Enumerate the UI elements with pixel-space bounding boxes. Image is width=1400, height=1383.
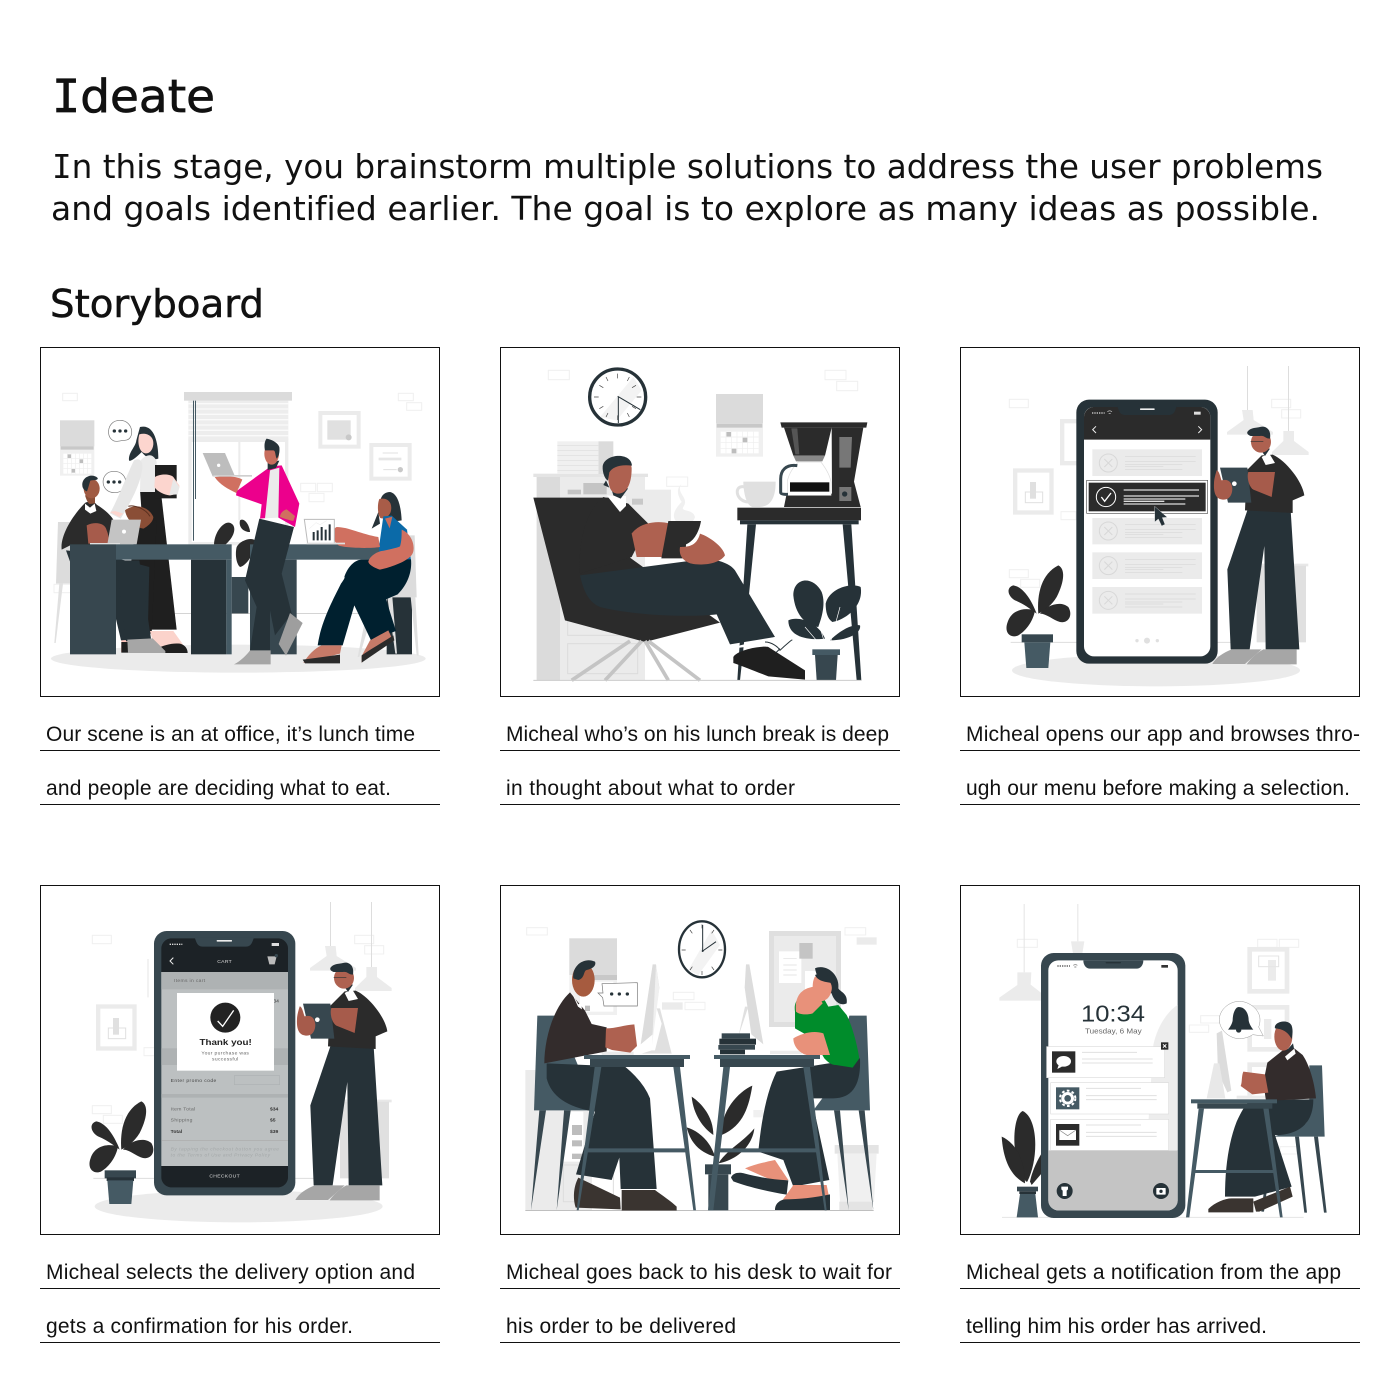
- wall frames: [318, 411, 412, 481]
- thank you card: successful: [212, 1057, 239, 1063]
- caption: Micheal goes back to his desk to wait for: [506, 1261, 892, 1284]
- plant: [1006, 565, 1070, 668]
- lock screen time: 10:34: [1081, 1000, 1145, 1026]
- selected row: [1087, 480, 1208, 513]
- phone text: CHECKOUT: [209, 1174, 240, 1180]
- phone: [1041, 953, 1185, 1218]
- plant: [687, 1086, 754, 1210]
- menu rows: [1092, 449, 1202, 614]
- phone: [154, 931, 295, 1195]
- front table: [70, 544, 232, 654]
- calendar: [716, 394, 763, 457]
- thank you card: Your purchase was: [201, 1050, 249, 1056]
- panel: back at desk: [500, 886, 900, 1342]
- man seated: [580, 456, 805, 680]
- bell bubble: [1219, 1001, 1263, 1039]
- wall frames: [1013, 419, 1080, 515]
- caption: telling him his order has arrived.: [966, 1315, 1267, 1338]
- window with blinds: [184, 392, 292, 544]
- phone text: $34: [270, 1106, 279, 1112]
- caption: and people are deciding what to eat.: [46, 777, 391, 800]
- lock screen time: [1081, 1000, 1145, 1035]
- woman standing: [110, 427, 188, 653]
- intro paragraph: and goals identified earlier. The goal is to explore as many ideas as possible.: [51, 189, 1320, 228]
- caption: [960, 723, 1360, 804]
- phone text: [161, 954, 288, 1180]
- illustration: phone notifications and man at desk: [999, 904, 1327, 1218]
- illustration: two people at desks: [525, 921, 879, 1211]
- lock screen time: Tuesday, 6 May: [1085, 1026, 1142, 1035]
- caption: [960, 1261, 1360, 1342]
- title: Ideate: [52, 70, 215, 123]
- man seated: [1208, 1022, 1316, 1212]
- caption: gets a confirmation for his order.: [46, 1315, 353, 1338]
- chair: [1261, 1065, 1327, 1213]
- caption: [500, 1261, 900, 1342]
- caption: [40, 1261, 440, 1342]
- wall frames: [96, 959, 149, 1051]
- panel: browsing the app: [960, 348, 1360, 804]
- illustration: man with coffee in armchair: [533, 369, 867, 680]
- caption: Micheal gets a notification from the app: [966, 1261, 1341, 1284]
- panel: notification: [960, 886, 1360, 1342]
- phone text: CART: [217, 959, 232, 965]
- side table: [737, 508, 861, 680]
- phone text: $39: [270, 1129, 279, 1135]
- speech bubbles: [103, 420, 132, 493]
- section heading: storyboard: Storyboard: [50, 282, 264, 326]
- book stack: [718, 1033, 756, 1054]
- phone: [1076, 400, 1218, 664]
- illustration: phone with thank you message: [89, 902, 392, 1222]
- cabinet and floor line: [1011, 564, 1308, 642]
- armchair: [533, 498, 720, 680]
- wall frames: [1247, 947, 1289, 1097]
- background cabinet and calendar: [525, 938, 617, 1210]
- calendar: [60, 420, 94, 476]
- cabinet and floor line: [93, 1100, 392, 1178]
- man with tablet: [1212, 427, 1304, 664]
- clock: [679, 921, 725, 977]
- phone text: By tapping the checkout button you agree: [171, 1146, 279, 1152]
- phone text: Total: [171, 1129, 183, 1135]
- monitor and keyboard: [1207, 1031, 1277, 1099]
- man with tablet: [295, 963, 387, 1200]
- caption: Micheal selects the delivery option and: [46, 1261, 415, 1284]
- desks: [577, 1055, 827, 1210]
- table rear: [250, 544, 412, 654]
- caption: Our scene is an at office, it’s lunch time: [46, 723, 415, 746]
- panel: lunch break: [500, 348, 900, 804]
- notice board: [769, 931, 841, 1027]
- pendant lamps: [1227, 366, 1309, 455]
- woman right: [303, 492, 419, 663]
- cup and steam: [674, 482, 776, 522]
- panel: office scene: [40, 348, 440, 804]
- monitors: [602, 964, 802, 1055]
- caption: Micheal opens our app and browses thro-: [966, 723, 1360, 746]
- caption: Micheal who’s on his lunch break is deep: [506, 723, 889, 746]
- phone text: $5: [270, 1118, 276, 1124]
- plant: [89, 1101, 153, 1204]
- pendant lamps: [310, 902, 392, 991]
- thank you card: [177, 993, 274, 1071]
- panel: order confirmation: [40, 886, 440, 1342]
- floor line: [1002, 1216, 1304, 1219]
- clock: [590, 369, 646, 425]
- chair left: [54, 522, 71, 643]
- caption: ugh our menu before making a selection.: [966, 777, 1350, 800]
- phone text: Items in cart: [174, 978, 206, 984]
- floor line: [525, 1209, 874, 1211]
- desk: [1186, 1099, 1283, 1217]
- intro paragraph: [51, 147, 1323, 228]
- chairs: [531, 1016, 873, 1210]
- woman at desk: [731, 967, 860, 1210]
- intro paragraph: In this stage, you brainstorm multiple solutions to address the user problems: [52, 147, 1323, 186]
- filing cabinet: [533, 441, 671, 680]
- caption: [40, 723, 440, 804]
- plant: [1002, 1111, 1042, 1217]
- small laptop chart: [304, 519, 345, 544]
- man at desk: [544, 960, 677, 1211]
- illustration: man beside phone with menu: [1006, 366, 1309, 686]
- cursor: [1155, 506, 1167, 526]
- man standing pink jacket: [203, 439, 303, 664]
- caption: in thought about what to order: [506, 777, 795, 800]
- phone text: Shipping: [171, 1118, 193, 1124]
- pendant lamps: [999, 904, 1084, 1001]
- illustration: people at office table: [51, 392, 426, 673]
- seated man left: [62, 476, 165, 653]
- coffee maker: [780, 422, 867, 507]
- plant behind: [214, 520, 255, 567]
- notification cards: [1047, 1042, 1169, 1150]
- laptop: [90, 520, 141, 545]
- phone text: Item Total: [171, 1106, 196, 1112]
- phone text: to the Terms of Use and Privacy Policy: [171, 1153, 271, 1159]
- plant: [788, 580, 861, 680]
- phone text: 34: [273, 999, 279, 1005]
- thank you card: Thank you!: [199, 1037, 252, 1047]
- phone text: Enter promo code: [171, 1078, 217, 1084]
- bin: [835, 1145, 879, 1210]
- caption: [500, 723, 900, 804]
- caption: his order to be delivered: [506, 1315, 736, 1338]
